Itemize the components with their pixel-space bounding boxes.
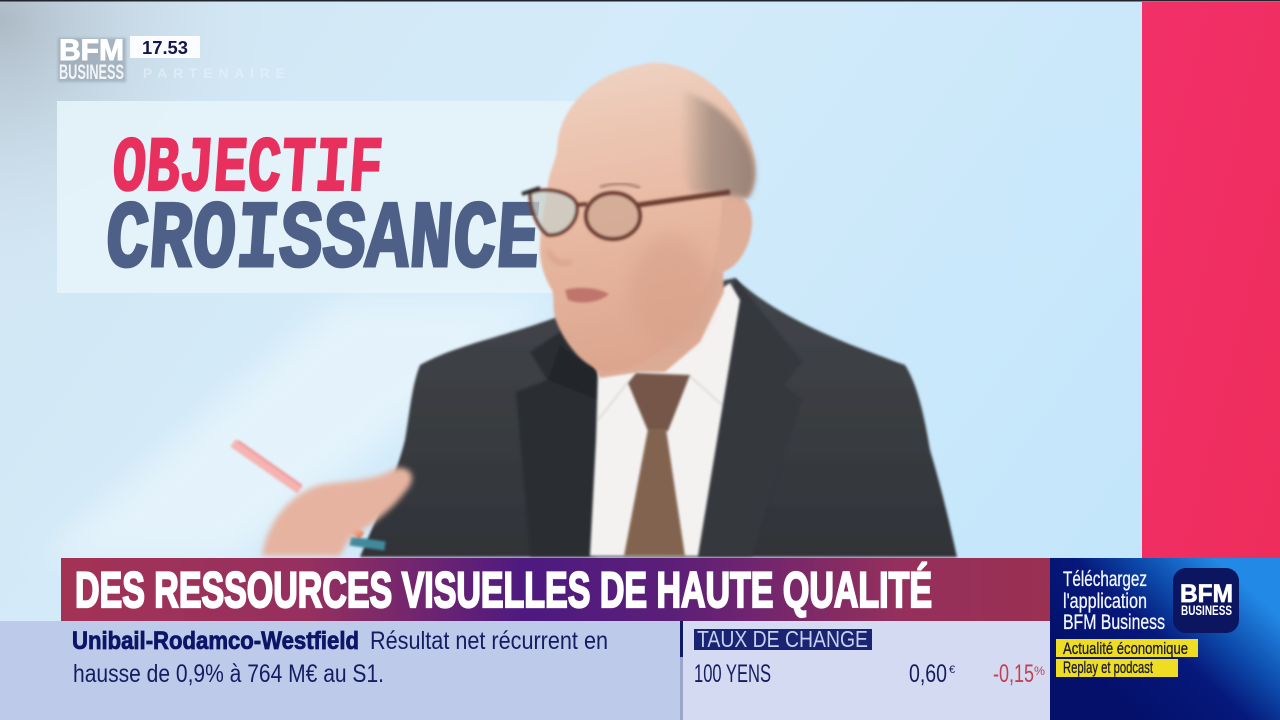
exchange heading: TAUX DE CHANGE: [697, 626, 868, 652]
nose shadow: [548, 250, 572, 263]
rate change: %: [1034, 664, 1045, 678]
tie: [624, 373, 690, 556]
logo: BFM Business: [58, 34, 126, 84]
hand: [262, 468, 412, 556]
currency name: 100 YENS: [694, 660, 771, 688]
rate change: -0,15: [993, 660, 1034, 688]
title line: Objectif: OBJECTIF: [109, 126, 385, 214]
neck and face: [540, 63, 755, 378]
presenter: [233, 63, 957, 557]
promo text: [1063, 568, 1165, 634]
promo text: BFM Business: [1063, 611, 1165, 634]
promo text: l'application: [1063, 590, 1147, 613]
panel: pink wall: [1142, 2, 1280, 558]
tag: replay and podcast: Replay et podcast: [1063, 658, 1153, 677]
panel: exchange rate ticker: [680, 621, 1050, 720]
headline banner: [61, 558, 1050, 622]
eyebrow: [600, 184, 640, 188]
logo BFM: BFM: [59, 34, 124, 67]
partner label: PARTENAIRE: [143, 65, 285, 81]
icon: BFM Business app: BUSINESS: [1181, 602, 1232, 618]
neck: [585, 250, 724, 378]
panel: app promo: [1050, 558, 1280, 720]
glasses: [522, 188, 730, 239]
icon: BFM Business app: [1173, 568, 1239, 633]
shirt: [590, 283, 740, 556]
title line: Croissance: CROISSANCE: [102, 187, 544, 295]
clock: [130, 36, 200, 58]
panel: show title backdrop: [57, 101, 577, 293]
temple hair: [675, 88, 755, 198]
cheek shading: [630, 235, 710, 345]
jacket lapels: [516, 278, 802, 556]
mouth: [565, 288, 609, 302]
panel: company news ticker: [0, 621, 680, 720]
rate value: €: [949, 664, 955, 676]
logo Business: BUSINESS: [59, 61, 124, 84]
tag: economic news: Actualité économique: [1063, 639, 1188, 658]
title: Objectif Croissance: [102, 126, 544, 295]
promo text: Téléchargez: [1063, 568, 1147, 591]
clock: 17.53: [142, 38, 188, 58]
rate value: 0,60: [909, 660, 947, 688]
ear: [708, 195, 752, 272]
logo mark shadow: [58, 38, 126, 82]
suit jacket: [360, 278, 957, 557]
pen: [233, 441, 385, 546]
news line 2: hausse de 0,9% à 764 M€ au S1.: [73, 660, 384, 688]
news line 1: Résultat net récurrent en: [370, 627, 608, 655]
company name: Unibail-Rodamco-Westfield: [72, 627, 359, 655]
head: [540, 63, 755, 372]
icon: BFM Business app: BFM: [1180, 580, 1233, 608]
